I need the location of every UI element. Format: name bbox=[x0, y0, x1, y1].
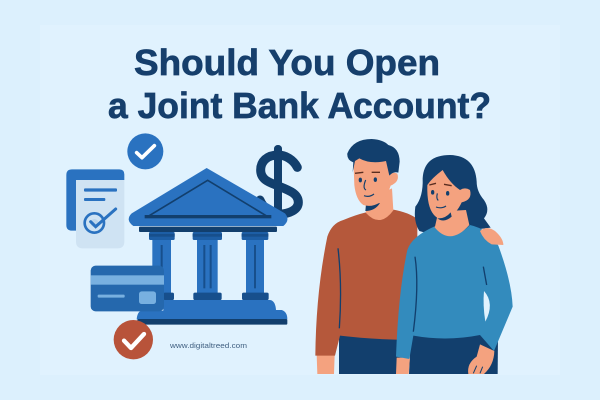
icon: red check badge bbox=[114, 320, 153, 359]
title bbox=[108, 42, 491, 126]
illustration: couple bbox=[315, 139, 513, 374]
icon: dollar sign bbox=[260, 145, 298, 217]
website url: www.digitaltreed.com bbox=[169, 341, 247, 350]
man bbox=[315, 139, 417, 374]
illustration: finance icons bbox=[66, 133, 298, 359]
title: Should You Open bbox=[134, 42, 440, 83]
icon: blue check badge bbox=[127, 133, 163, 169]
title: a Joint Bank Account? bbox=[108, 85, 491, 126]
icon: credit card bbox=[91, 266, 164, 311]
man's hand on shoulder bbox=[480, 228, 503, 245]
icon: document with check bbox=[66, 169, 124, 248]
woman bbox=[396, 155, 513, 374]
icon: bank building bbox=[129, 168, 287, 325]
